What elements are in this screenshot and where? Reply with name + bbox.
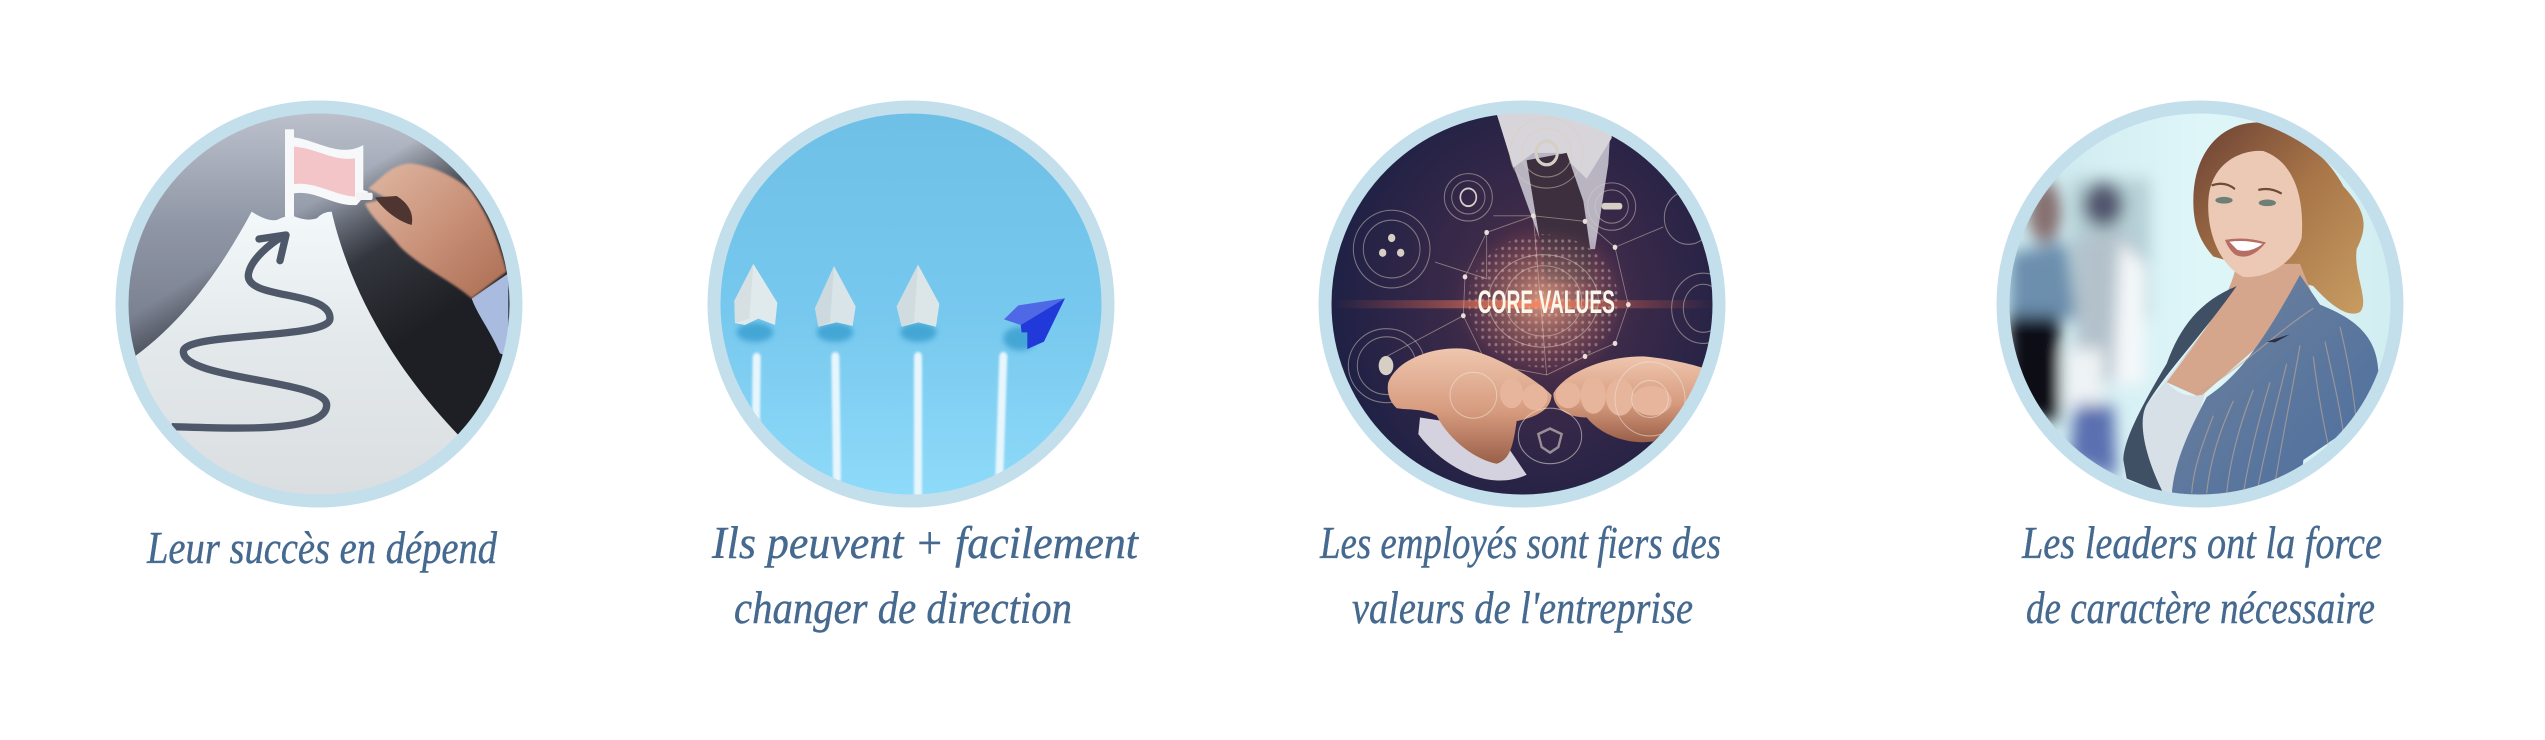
top: [2143, 338, 2205, 493]
hair: [2193, 123, 2364, 314]
shirt and tie: [1495, 108, 1612, 282]
winding arrow path: [172, 235, 330, 428]
rings over hands: [1450, 362, 1685, 464]
caption: Ils peuvent + facilement: [711, 518, 1139, 568]
network lines: [1387, 216, 1663, 375]
caption: [711, 518, 1139, 633]
panel: direction: [690, 90, 1160, 633]
jacket: [2123, 275, 2378, 497]
panel: core values: [1318, 100, 1726, 633]
glow and light streak: [1342, 231, 1704, 368]
photo: smiling businesswoman: [2010, 114, 2390, 494]
face: [2208, 151, 2302, 277]
caption: changer de direction: [734, 583, 1072, 633]
mountain: [136, 212, 458, 494]
caption: [2021, 518, 2382, 633]
hand with chalk: [356, 163, 508, 357]
small icons: [1379, 141, 1622, 375]
blue plane: [1004, 298, 1065, 349]
flag: [285, 129, 368, 217]
white planes: [734, 264, 939, 327]
panel: success: [116, 100, 522, 573]
ring: [1325, 107, 1719, 501]
neck and chest: [2167, 264, 2313, 397]
photo: paper planes: [720, 114, 1102, 494]
panel: leaders: [1996, 100, 2404, 624]
blurred colleagues: [2008, 179, 2150, 479]
network nodes: [1461, 213, 1631, 359]
caption: Les leaders ont la force: [2021, 518, 2382, 568]
photo: hands holding core values: [1332, 114, 1712, 494]
vapour trails: [756, 356, 1003, 497]
caption: Les employés sont fiers des: [1319, 518, 1721, 568]
caption: Leur succès en dépend: [146, 523, 497, 573]
HUD rings: [1348, 118, 1735, 403]
ring: [2003, 107, 2397, 501]
photo: hand drawing a mountain and flag: [128, 114, 510, 494]
sleeve cuff: [1418, 417, 1527, 481]
ring: [714, 107, 1108, 501]
ring: [122, 107, 516, 501]
core values label: CORE VALUES: [1478, 284, 1615, 320]
caption: [1319, 518, 1721, 633]
hands: [1388, 348, 1702, 464]
caption: de caractère nécessaire: [2026, 583, 2375, 633]
caption: valeurs de l'entreprise: [1352, 583, 1693, 633]
plane shadows: [737, 323, 1037, 350]
